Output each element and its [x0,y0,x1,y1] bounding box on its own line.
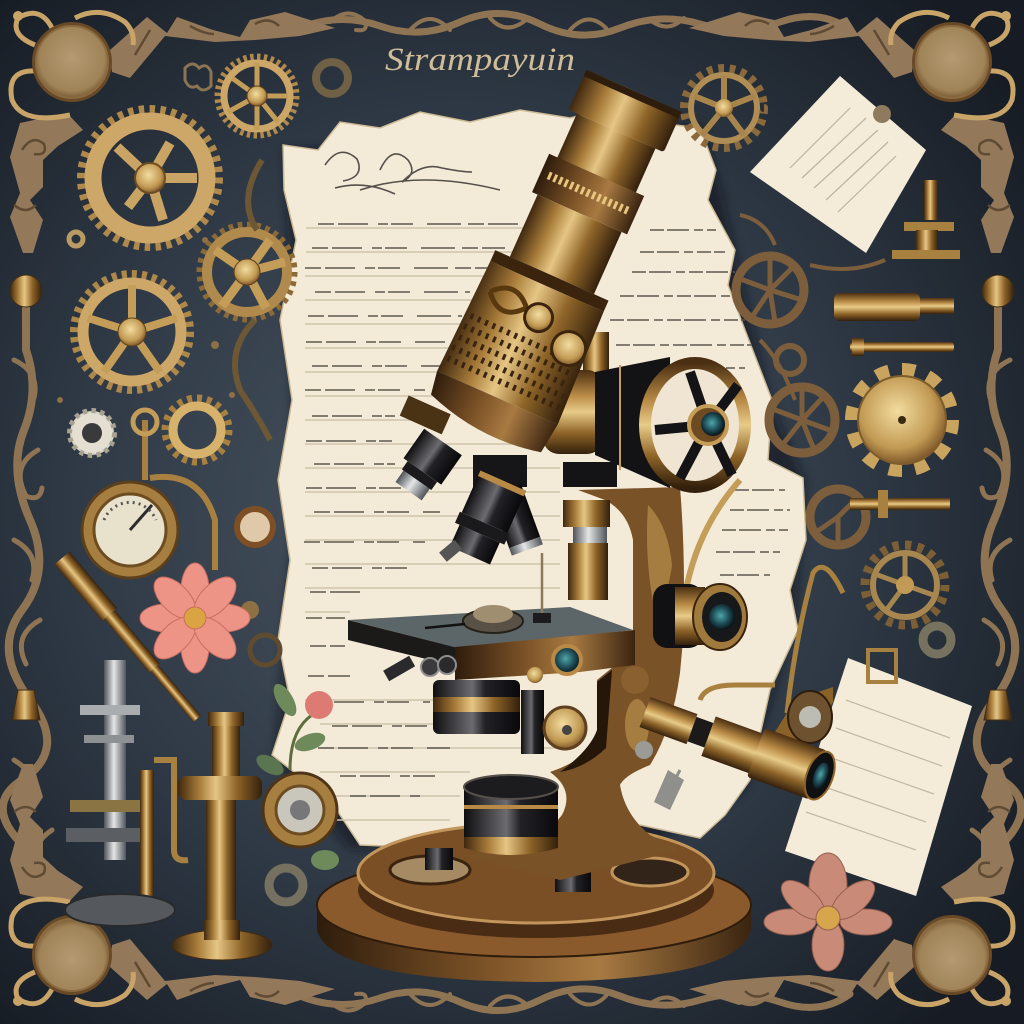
top scrollwork [300,13,850,36]
side finials [10,275,1014,720]
right scrollwork [972,300,1021,886]
small decorative dots and filigree [57,160,280,665]
note: top right [750,76,926,253]
brass dial gadget [263,773,339,870]
corner: bottom left [10,764,335,1006]
small cog under gadget [269,868,303,902]
stage assembly [348,553,635,683]
bottom scrollwork [300,988,850,1011]
small lens button [237,509,273,545]
engraved band [532,154,644,234]
pressure gauge [82,410,215,578]
filigree top left [185,64,211,90]
gear: lower left large [74,274,190,390]
curved arm and pillar [463,487,684,880]
objectives [390,429,543,567]
gear: top centre left [218,57,296,135]
ornate body [437,260,607,425]
parchment shadow [275,125,805,850]
black foot cylinder [464,775,558,855]
parchment [272,108,806,848]
gear: middle left small [200,225,294,319]
gear: large top left [81,109,219,247]
ruled lines [305,228,560,820]
main tube [400,58,694,476]
note: bottom right [785,650,972,896]
lower right eyepiece arm [621,567,843,810]
side lens [653,584,747,650]
brass spyglass right [834,293,954,321]
condenser under stage [433,680,586,754]
base [317,823,751,982]
microscope [317,58,843,982]
small washer [923,626,951,654]
handwriting lines right [610,230,790,575]
brass telescope [54,552,205,725]
silver small microscope [65,660,188,926]
small ring gear [165,398,229,462]
left scrollwork [3,300,52,886]
corner: bottom right [689,764,1014,1006]
gold arm ornaments [625,505,672,751]
dark inner shadow under stage [560,670,612,772]
paper heading flourish [325,152,500,194]
brass rod right [850,338,954,356]
upright brass column [563,462,740,600]
nosepiece tab [400,396,451,434]
pink flower [140,563,250,673]
dusty pink flower [764,853,892,971]
handwriting lines left [304,224,520,796]
corner: top right [689,11,1014,253]
rotating barrel and wheel [543,332,745,488]
brass key right [850,490,950,518]
corner: top left [10,11,335,253]
gold disc gear right [852,370,952,470]
bronze gear lower right [865,545,945,625]
nosepiece collar [422,371,558,459]
gear: top right [684,68,764,148]
small white gear [70,411,114,455]
small flower sprig [253,680,333,779]
title: Strampayuin [385,42,575,78]
ring gear: small top [316,62,348,94]
bronze mechanism right side [736,215,885,545]
brass column stand [172,712,272,960]
brass instrument top right [892,180,960,259]
